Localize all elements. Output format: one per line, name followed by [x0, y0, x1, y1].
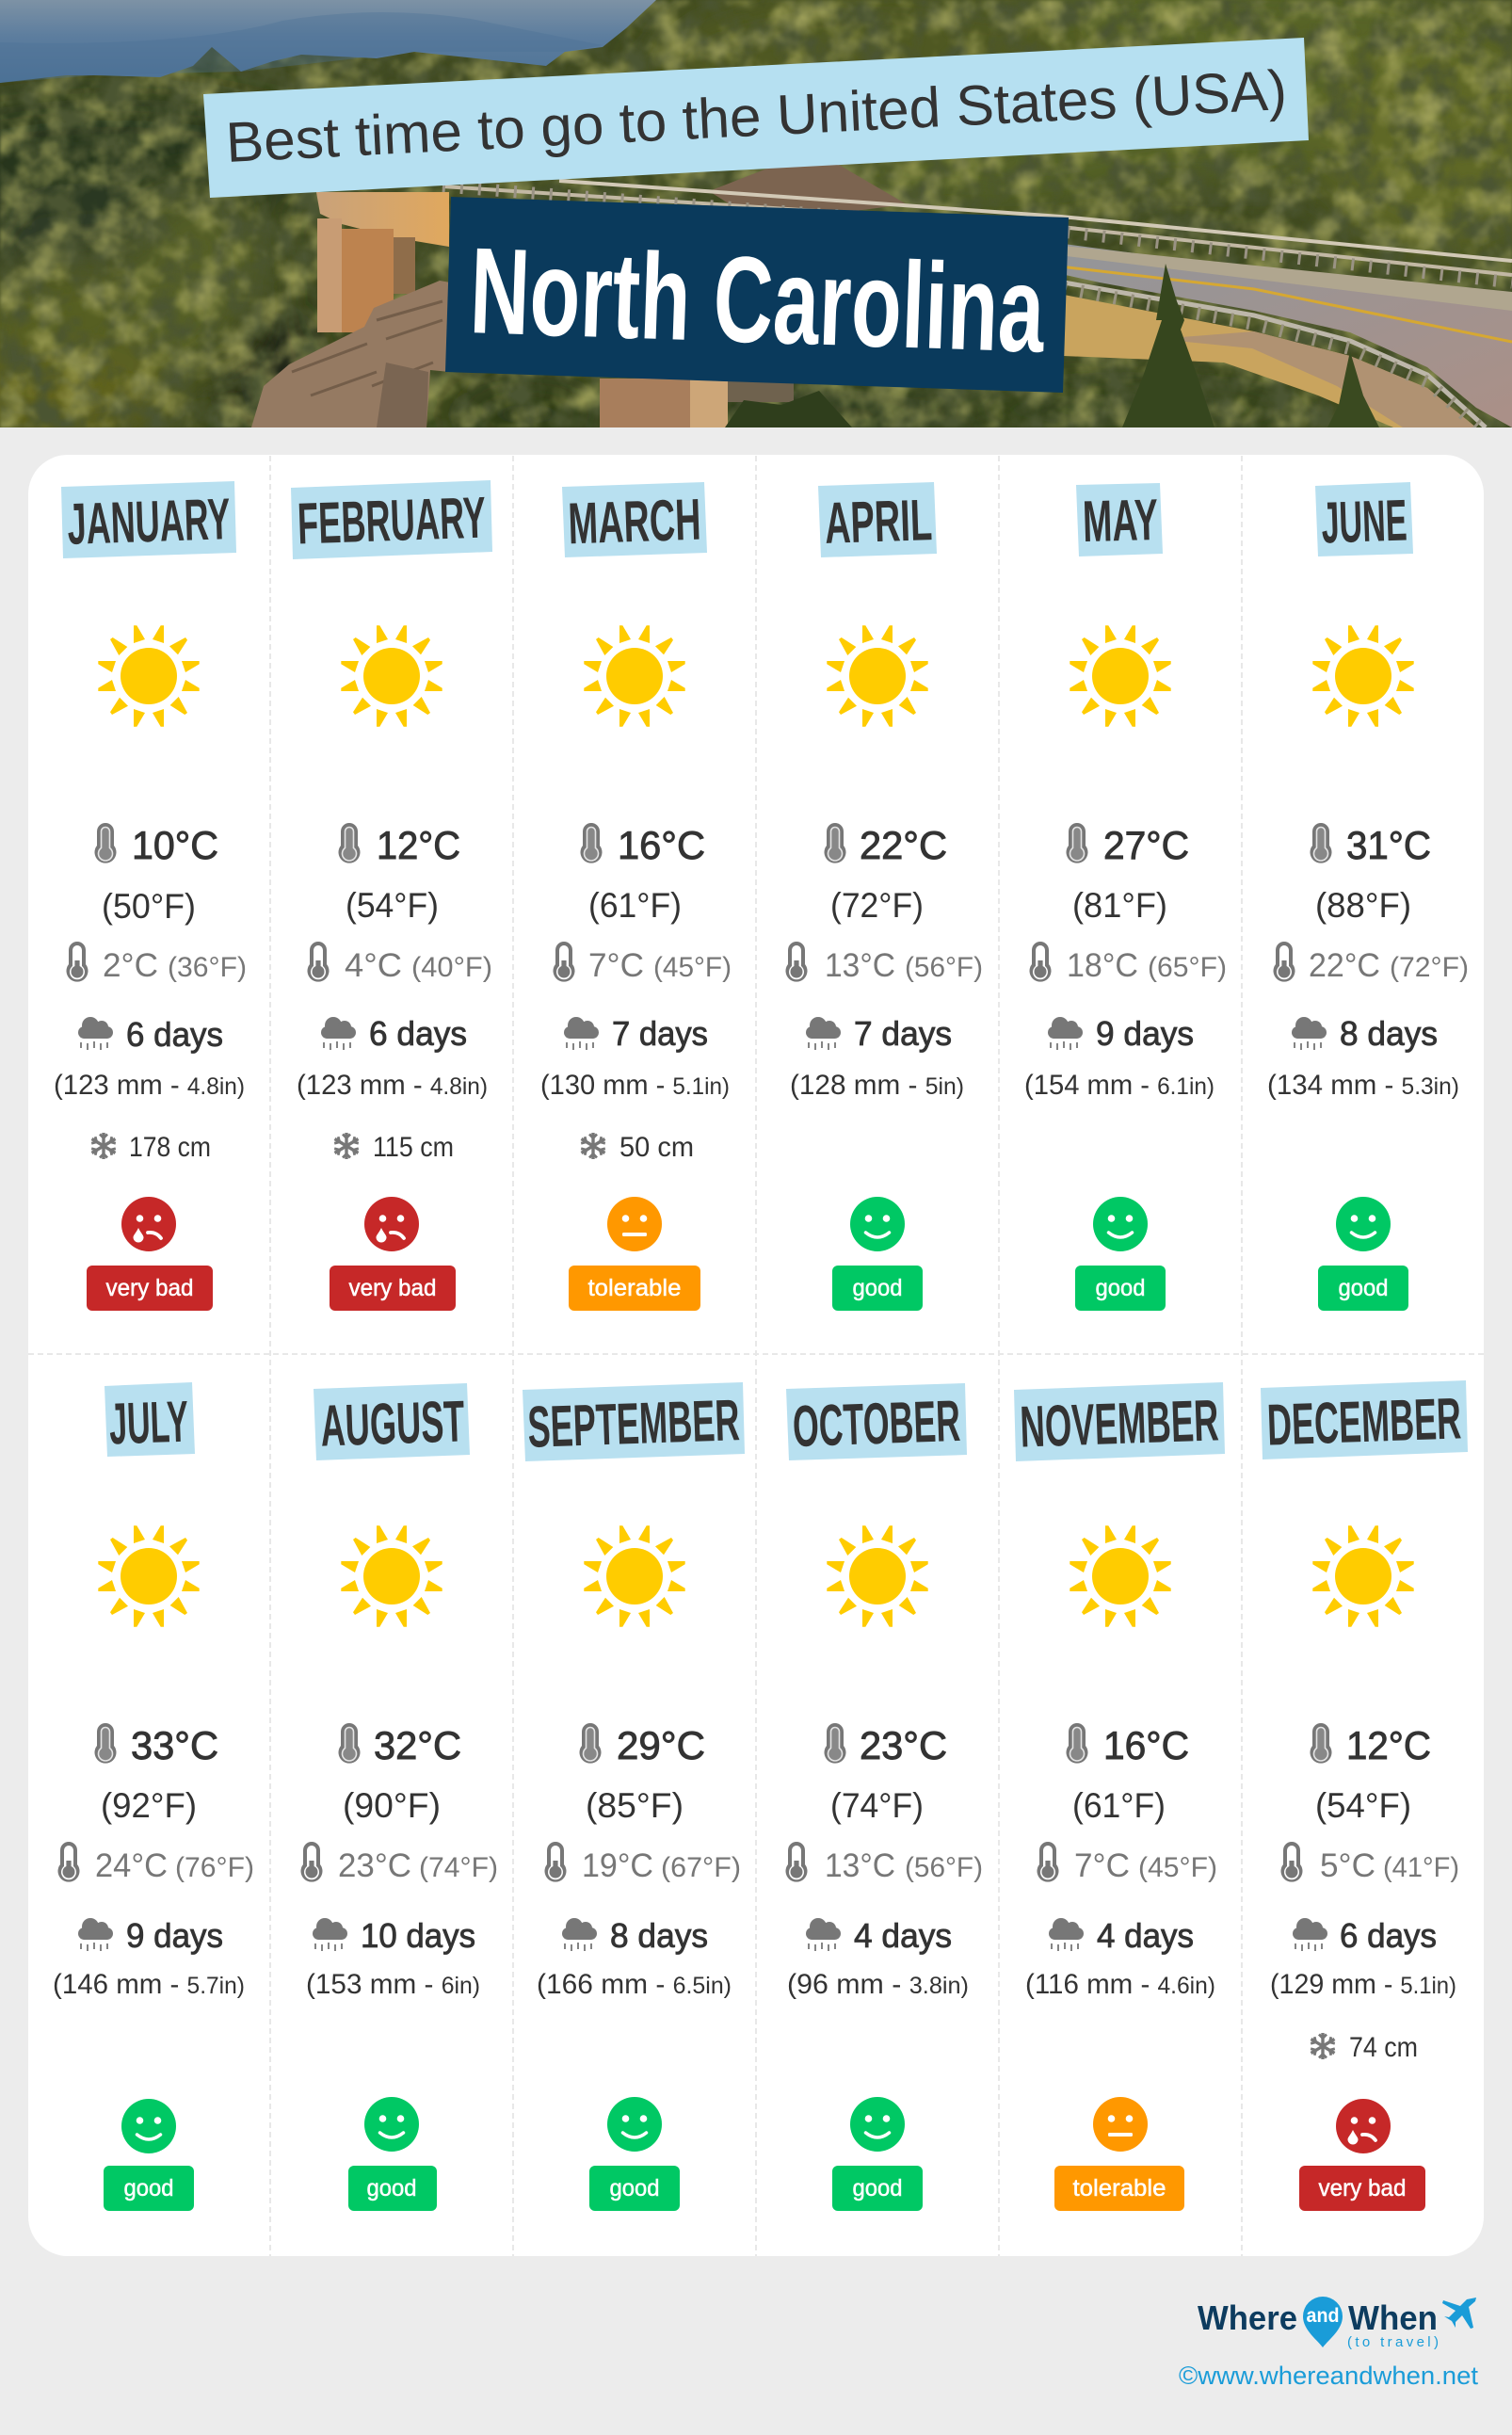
average low temperature: (45°F) — [653, 952, 732, 983]
average low temperature — [554, 942, 732, 984]
rating face — [1093, 1197, 1148, 1251]
month heading — [786, 1383, 967, 1460]
month heading — [314, 1383, 470, 1460]
icon: sun — [98, 625, 200, 727]
rainfall: (123 mm - 4.8in) — [297, 1070, 488, 1101]
icon: sun — [1070, 1525, 1171, 1627]
average high temperature: 16°C — [618, 823, 705, 867]
average high temperature: 31°C — [1346, 823, 1431, 867]
icon: sun — [1070, 625, 1171, 727]
snowfall — [1311, 2032, 1418, 2063]
rainy days — [78, 1015, 223, 1054]
snowfall — [334, 1132, 454, 1163]
average low temperature: 24°C — [95, 1847, 168, 1884]
rainfall: (128 mm - 5in) — [790, 1070, 964, 1101]
high in Fahrenheit: (72°F) — [830, 886, 924, 925]
month heading — [105, 1382, 195, 1457]
average low temperature — [1030, 942, 1227, 984]
month heading: APRIL — [824, 488, 933, 556]
average low temperature: (41°F) — [1383, 1852, 1459, 1883]
month heading — [562, 482, 707, 557]
logo: Where and When (to travel): and — [1307, 2305, 1339, 2327]
average low temperature: 5°C — [1320, 1847, 1375, 1884]
title banner: Best time to go to the United States (USA): Best time to go to the United States (USA) — [224, 58, 1288, 174]
average low temperature: (40°F) — [411, 952, 492, 983]
rainy days — [806, 1014, 952, 1053]
rainy days: 6 days — [369, 1014, 467, 1053]
rainy days: 6 days — [126, 1015, 223, 1054]
rating face — [607, 2097, 662, 2152]
average low temperature: 13°C — [825, 1847, 895, 1884]
average low temperature: 7°C — [1074, 1847, 1130, 1884]
average high temperature: 10°C — [132, 823, 218, 867]
month heading: OCTOBER — [792, 1389, 961, 1459]
rainy days: 4 days — [1097, 1916, 1194, 1955]
panel: August — [301, 1383, 498, 2211]
column and row dividers — [28, 456, 1484, 2256]
rating badge — [589, 2166, 680, 2211]
rating badge: very bad — [348, 1275, 437, 1301]
month heading: JUNE — [1320, 489, 1408, 556]
snowfall: 50 cm — [619, 1132, 694, 1163]
rainfall: (116 mm - 4.6in) — [1025, 1969, 1215, 2000]
the road — [1036, 240, 1512, 427]
average low temperature: (56°F) — [905, 952, 983, 983]
rainy days — [321, 1014, 467, 1053]
rating face — [1093, 2097, 1148, 2152]
icon: map pin — [1303, 2297, 1343, 2347]
average high temperature — [1066, 823, 1189, 867]
average low temperature: 23°C — [338, 1847, 411, 1884]
rainy days — [564, 1014, 708, 1053]
panel: September — [523, 1382, 745, 2211]
panel: May — [1024, 483, 1227, 1311]
average low temperature — [544, 1842, 741, 1884]
rainy days: 4 days — [854, 1916, 952, 1955]
rating badge — [330, 1266, 456, 1311]
rating badge — [104, 2166, 194, 2211]
rainy days — [562, 1916, 708, 1955]
average low temperature: 4°C — [345, 947, 402, 984]
rating badge: good — [124, 2175, 173, 2201]
average low temperature: 22°C — [1309, 947, 1380, 984]
rating badge — [569, 1266, 700, 1311]
month heading: NOVEMBER — [1019, 1388, 1220, 1460]
average low temperature: (36°F) — [168, 952, 247, 983]
rating badge: very bad — [1318, 2175, 1407, 2201]
rating badge: good — [367, 2175, 416, 2201]
rating badge — [348, 2166, 437, 2211]
high in Fahrenheit: (85°F) — [586, 1786, 684, 1825]
panel: January — [54, 481, 247, 1311]
average high temperature — [1311, 823, 1431, 867]
panel: April — [785, 482, 983, 1311]
logo: Where and When (to travel) — [1198, 2297, 1476, 2350]
average high temperature: 16°C — [1103, 1723, 1189, 1767]
icon: sun — [341, 1525, 442, 1627]
rainy days — [1293, 1916, 1437, 1955]
rainy days: 7 days — [854, 1014, 952, 1053]
rainfall: (134 mm - 5.3in) — [1267, 1070, 1459, 1101]
rainy days: 10 days — [361, 1916, 475, 1955]
rainy days — [806, 1916, 952, 1955]
rainy days — [313, 1916, 475, 1955]
month heading: FEBRUARY — [297, 486, 487, 556]
average high temperature — [94, 823, 218, 867]
high in Fahrenheit: (92°F) — [101, 1786, 197, 1825]
month heading — [1076, 483, 1163, 556]
average high temperature: 23°C — [860, 1723, 947, 1767]
average low temperature: (45°F) — [1138, 1852, 1217, 1883]
panel: November — [1014, 1382, 1225, 2211]
rainfall: (123 mm - 4.8in) — [54, 1070, 245, 1101]
average low temperature — [307, 942, 492, 984]
snowfall: 178 cm — [129, 1132, 211, 1163]
rainfall: (130 mm - 5.1in) — [540, 1070, 730, 1101]
average high temperature: 29°C — [617, 1723, 705, 1767]
average low temperature: 7°C — [588, 947, 644, 984]
high in Fahrenheit: (54°F) — [1315, 1786, 1411, 1825]
icon: sun — [827, 1525, 928, 1627]
month heading: JANUARY — [66, 487, 232, 557]
rating badge: tolerable — [1073, 2175, 1166, 2201]
average low temperature — [58, 1842, 254, 1884]
high in Fahrenheit: (81°F) — [1072, 886, 1167, 925]
average low temperature: 19°C — [582, 1847, 653, 1884]
average low temperature: (72°F) — [1390, 952, 1469, 983]
rating badge — [1075, 1266, 1166, 1311]
rainy days — [1292, 1014, 1438, 1053]
high in Fahrenheit: (61°F) — [588, 886, 682, 925]
rating face — [1336, 2099, 1391, 2153]
rating badge — [1054, 2166, 1184, 2211]
logo: Where and When (to travel): Where — [1198, 2298, 1297, 2337]
month heading — [818, 482, 937, 557]
average low temperature — [1280, 1842, 1459, 1884]
high in Fahrenheit: (74°F) — [830, 1786, 924, 1825]
month heading: SEPTEMBER — [526, 1388, 741, 1460]
average low temperature: (74°F) — [419, 1852, 498, 1883]
month heading — [61, 481, 236, 558]
average low temperature: (65°F) — [1148, 952, 1227, 983]
snowfall: 115 cm — [373, 1132, 454, 1163]
panel: October — [785, 1383, 983, 2211]
rating badge: tolerable — [587, 1275, 682, 1301]
rating badge — [832, 2166, 923, 2211]
copyright url: ©www.whereandwhen.net — [1179, 2362, 1478, 2390]
snowfall — [581, 1132, 694, 1163]
rainy days: 9 days — [126, 1916, 223, 1955]
panel: July — [53, 1382, 254, 2211]
rating badge: good — [1096, 1275, 1145, 1301]
average low temperature — [301, 1842, 498, 1884]
average high temperature — [1066, 1723, 1189, 1767]
rating badge: good — [853, 2175, 902, 2201]
title banner: North Carolina — [445, 197, 1069, 393]
average high temperature: 22°C — [860, 823, 947, 867]
icon: sun — [584, 1525, 685, 1627]
icon: sun — [98, 1525, 200, 1627]
month heading — [291, 480, 492, 559]
icon: sun — [341, 625, 442, 727]
panel: June — [1267, 482, 1469, 1311]
rating badge: good — [1339, 1275, 1388, 1301]
rainfall: (154 mm - 6.1in) — [1024, 1070, 1214, 1101]
average low temperature — [785, 1842, 983, 1884]
average high temperature — [580, 823, 705, 867]
rating badge: very bad — [105, 1275, 194, 1301]
average high temperature: 27°C — [1103, 823, 1189, 867]
average low temperature — [785, 942, 983, 984]
viaduct — [316, 192, 449, 247]
high in Fahrenheit: (88°F) — [1315, 886, 1411, 925]
icon: sun — [1312, 1525, 1414, 1627]
average high temperature — [339, 823, 460, 867]
rating badge — [1318, 1266, 1408, 1311]
rainfall: (96 mm - 3.8in) — [787, 1969, 969, 2000]
panel: March — [540, 482, 732, 1311]
main white calendar panel — [28, 455, 1484, 2256]
rainfall: (146 mm - 5.7in) — [53, 1969, 245, 2000]
average low temperature: 18°C — [1067, 947, 1138, 984]
icon: sun — [827, 625, 928, 727]
rating face — [364, 2097, 419, 2152]
rainy days — [1048, 1014, 1194, 1053]
high in Fahrenheit: (90°F) — [343, 1786, 441, 1825]
average low temperature — [1037, 1842, 1217, 1884]
rating face — [121, 2099, 176, 2153]
panel: February — [291, 480, 492, 1311]
snowfall — [91, 1132, 211, 1163]
logo: Where and When (to travel): (to travel) — [1347, 2334, 1439, 2350]
rating badge: good — [610, 2175, 659, 2201]
average low temperature: (76°F) — [175, 1852, 254, 1883]
month heading: AUGUST — [319, 1389, 466, 1459]
average low temperature: (67°F) — [661, 1852, 741, 1883]
average high temperature — [1311, 1723, 1431, 1767]
month heading — [1315, 482, 1413, 556]
icon: sun — [1312, 625, 1414, 727]
high in Fahrenheit: (61°F) — [1072, 1786, 1166, 1825]
rating badge — [832, 1266, 923, 1311]
average high temperature: 32°C — [374, 1723, 461, 1767]
high in Fahrenheit: (54°F) — [346, 886, 439, 925]
rainfall: (129 mm - 5.1in) — [1270, 1969, 1456, 2000]
logo: Where and When (to travel): When — [1348, 2298, 1438, 2337]
rating face — [607, 1197, 662, 1251]
month heading: JULY — [108, 1390, 189, 1457]
title banner: North Carolina: North Carolina — [468, 221, 1048, 379]
month heading: MARCH — [567, 488, 702, 556]
title banner: Best time to go to the United States (USA) — [203, 38, 1309, 198]
rating badge — [1299, 2166, 1425, 2211]
rainfall: (153 mm - 6in) — [306, 1969, 480, 2000]
month heading: MAY — [1082, 488, 1159, 555]
snowfall: 74 cm — [1349, 2032, 1418, 2063]
panel: December — [1261, 1380, 1468, 2211]
rainy days: 6 days — [1340, 1916, 1437, 1955]
average low temperature: 2°C — [103, 947, 158, 984]
icon: sun — [584, 625, 685, 727]
rainy days: 8 days — [1340, 1014, 1438, 1053]
average high temperature: 12°C — [377, 823, 460, 867]
rainy days: 8 days — [610, 1916, 708, 1955]
average high temperature: 12°C — [1346, 1723, 1431, 1767]
rainy days — [78, 1916, 223, 1955]
rating badge — [87, 1266, 213, 1311]
average low temperature: (56°F) — [905, 1852, 983, 1883]
month heading — [1014, 1382, 1225, 1461]
rating face — [850, 1197, 905, 1251]
rainfall: (166 mm - 6.5in) — [537, 1969, 732, 2000]
header photo: Linn Cove viaduct in forest — [0, 0, 1512, 447]
rainy days — [1049, 1916, 1194, 1955]
rainy days: 9 days — [1096, 1014, 1194, 1053]
average low temperature — [66, 942, 247, 984]
average low temperature — [1273, 942, 1469, 984]
rating badge: good — [853, 1275, 902, 1301]
high in Fahrenheit: (50°F) — [102, 887, 196, 926]
rating face — [364, 1197, 419, 1251]
rainy days: 7 days — [612, 1014, 708, 1053]
icon: plane — [1442, 2298, 1476, 2329]
rating face — [850, 2097, 905, 2152]
rating face — [121, 1197, 176, 1251]
average low temperature: 13°C — [825, 947, 895, 984]
rating face — [1336, 1197, 1391, 1251]
average high temperature: 33°C — [131, 1723, 218, 1767]
month heading — [523, 1382, 745, 1461]
